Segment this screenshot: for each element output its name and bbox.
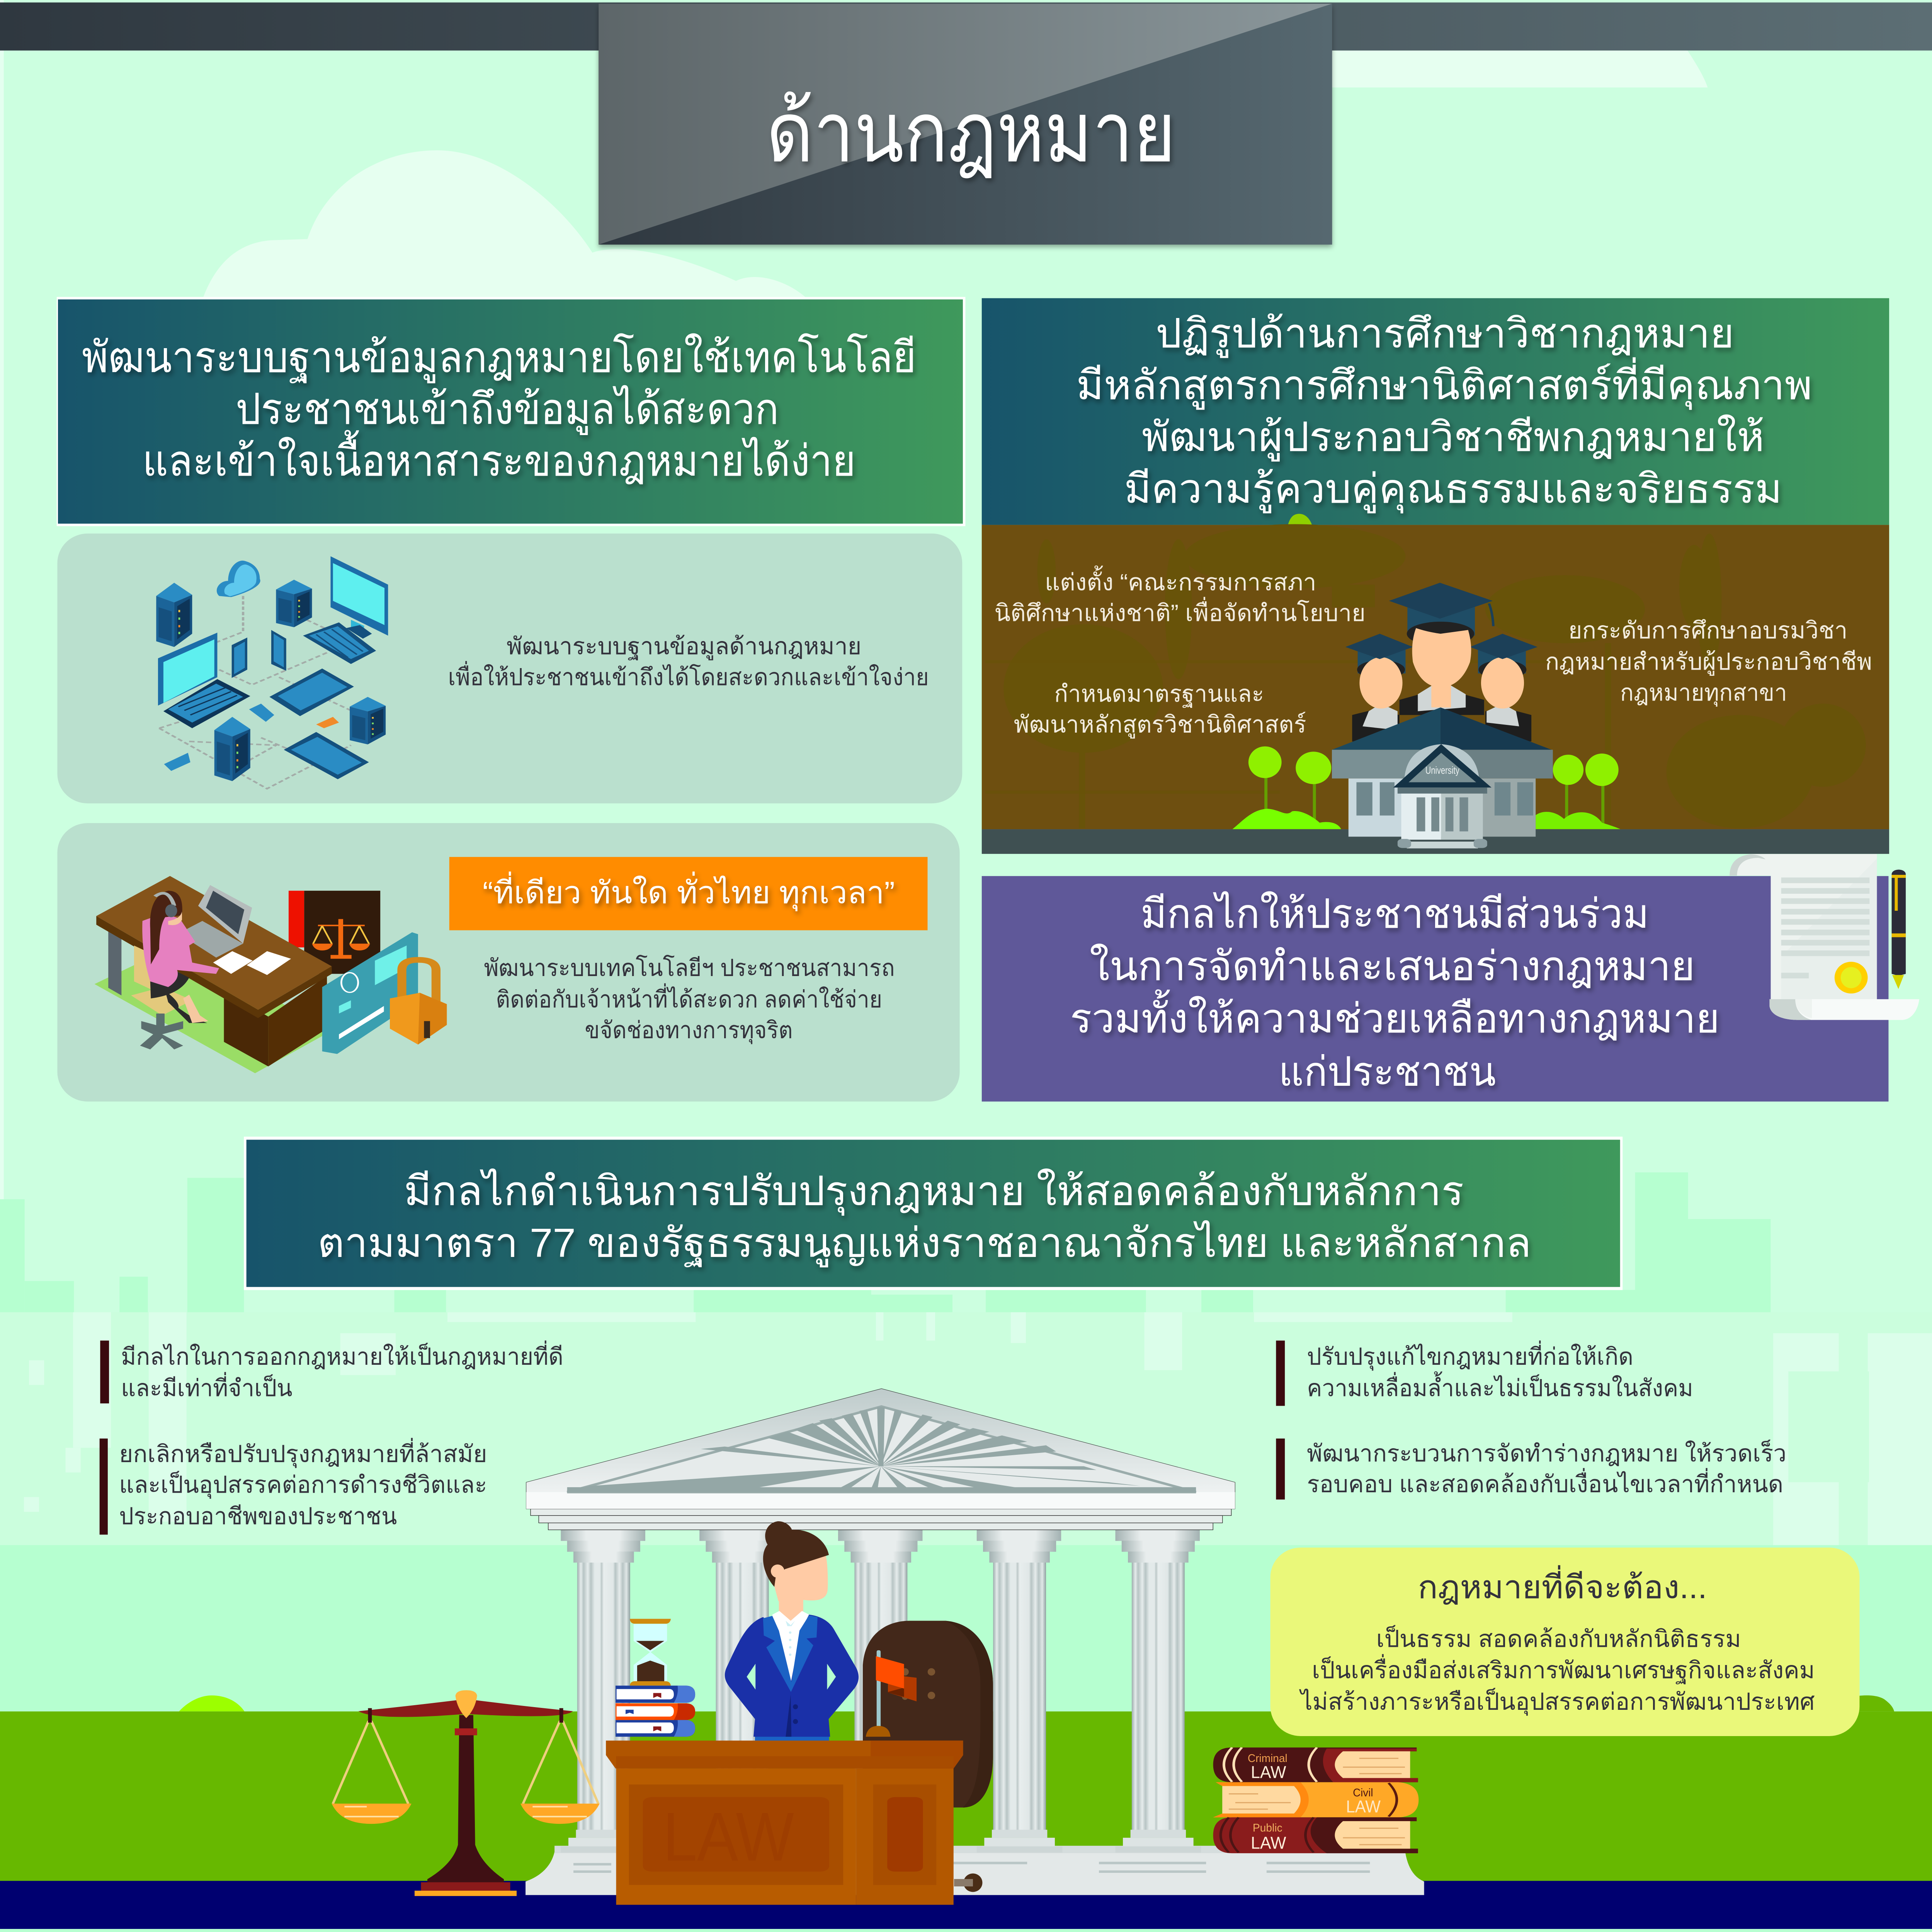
panel: legal database heading [57, 297, 965, 526]
heading text: legal education: มีหลักสูตรการศึกษานิติศาสตร์ที่มีคุณภาพ [1076, 357, 1812, 410]
icon: woman at desk with card and lock [95, 876, 447, 1073]
clouds [203, 51, 1708, 298]
illustration: courthouse temple [526, 1389, 1424, 1895]
book labels: Civil [1353, 1787, 1373, 1799]
illustration: balance scale [332, 1690, 600, 1896]
heading text: law reform: ตามมาตรา 77 ของรัฐธรรมนูญแห่งราชอาณาจักรไทย และหลักสากล [318, 1220, 1531, 1267]
book labels: LAW [1251, 1833, 1286, 1853]
bullet: good law: และมีเท่าที่จำเป็น [121, 1372, 293, 1401]
text: technology description: พัฒนาระบบเทคโนโลยีฯ ประชาชนสามารถ [484, 954, 895, 981]
heading text: legal education: พัฒนาผู้ประกอบวิชาชีพกฎหมายให้ [1142, 414, 1764, 462]
title text: ด้านกฎหมาย [766, 86, 1176, 179]
road [982, 829, 1889, 854]
panel: technology service card [57, 823, 960, 1102]
icon: hourglass and small books [616, 1619, 695, 1737]
desk label LAW: LAW [663, 1798, 794, 1876]
icon: network of devices [156, 556, 388, 789]
callout body: เป็นธรรม สอดคล้องกับหลักนิติธรรม [1376, 1625, 1741, 1652]
illustration: stack of law books [1213, 1747, 1418, 1853]
text: raise training level: กฎหมายสำหรับผู้ประกอบวิชาชีพ [1545, 649, 1872, 676]
bullet: drafting process: รอบคอบ และสอดคล้องกับเงื่อนไขเวลาที่กำหนด [1307, 1468, 1783, 1497]
bullet: fix unfair laws [1276, 1340, 1693, 1406]
callout: good law must be [1270, 1548, 1859, 1736]
heading text: legal education [1076, 311, 1812, 514]
callout: orange slogan [449, 857, 928, 930]
heading text: legal database [82, 333, 916, 485]
grass band [0, 1711, 1932, 1881]
bullet: fix unfair laws: ความเหลื่อมล้ำและไม่เป็นธรรมในสังคม [1307, 1371, 1693, 1401]
heading text: legal database: พัฒนาระบบฐานข้อมูลกฎหมายโดยใช้เทคโนโลยี [82, 333, 916, 384]
bullet: good law [100, 1340, 563, 1403]
bullet: drafting process [1276, 1439, 1786, 1500]
text: raise training level [1545, 617, 1872, 707]
heading text: public participation: มีกลไกให้ประชาชนมีส่วนร่วม [1141, 891, 1649, 937]
heading text: legal database: และเข้าใจเนื้อหาสาระของกฎหมายได้ง่าย [143, 430, 856, 485]
ground navy band [0, 1881, 1932, 1929]
illustration: graduates and university [1233, 583, 1620, 849]
callout body: ไม่สร้างภาระหรือเป็นอุปสรรคต่อการพัฒนาประเทศ [1299, 1688, 1815, 1716]
book labels [1248, 1752, 1381, 1853]
book labels: Criminal [1248, 1752, 1287, 1765]
text: raise training level: ยกระดับการศึกษาอบรมวิชา [1568, 617, 1847, 643]
bullet: repeal outdated laws [100, 1438, 487, 1535]
text: curriculum standard: พัฒนาหลักสูตรวิชานิติศาสตร์ [1014, 711, 1306, 739]
callout heading: กฎหมายที่ดีจะต้อง... [1418, 1565, 1707, 1605]
illustration: lawyer, desk and chair [606, 1521, 993, 1905]
heading text: legal database: ประชาชนเข้าถึงข้อมูลได้สะดวก [236, 385, 779, 435]
heading text: public participation: รวมทั้งให้ความช่วยเหลือทางกฎหมาย [1070, 989, 1719, 1041]
heading text: law reform: มีกลไกดำเนินการปรับปรุงกฎหมาย ให้สอดคล้องกับหลักการ [404, 1168, 1464, 1216]
title panel [599, 4, 1332, 245]
text: database description [448, 633, 929, 690]
bullet: repeal outdated laws: ประกอบอาชีพของประชาชน [119, 1503, 397, 1529]
text: appoint committee: แต่งตั้ง “คณะกรรมการสภา [1045, 565, 1316, 595]
bullet: good law: มีกลไกในการออกกฎหมายให้เป็นกฎหมายที่ดี [121, 1340, 563, 1369]
callout body: เป็นเครื่องมือส่งเสริมการพัฒนาเศรษฐกิจและสังคม [1312, 1654, 1815, 1684]
book labels: Public [1253, 1822, 1282, 1834]
bullet: repeal outdated laws: และเป็นอุปสรรคต่อการดำรงชีวิตและ [119, 1471, 487, 1499]
heading text: law reform [318, 1168, 1531, 1267]
text: database description: เพื่อให้ประชาชนเข้าถึงได้โดยสะดวกและเข้าใจง่าย [448, 661, 929, 690]
panel: legal education heading [982, 298, 1889, 525]
text: curriculum standard: กำหนดมาตรฐานและ [1054, 681, 1264, 708]
panel: public participation [982, 876, 1888, 1102]
heading text: public participation: ในการจัดทำและเสนอร่างกฎหมาย [1090, 944, 1695, 989]
text: raise training level: กฎหมายทุกสาขา [1620, 679, 1787, 707]
text: curriculum standard [1014, 681, 1306, 739]
heading text: legal education: ปฏิรูปด้านการศึกษาวิชากฎหมาย [1156, 311, 1734, 358]
bullet: repeal outdated laws: ยกเลิกหรือปรับปรุงกฎหมายที่ล้าสมัย [119, 1438, 487, 1468]
panel: law reform heading [244, 1137, 1622, 1290]
text: database description: พัฒนาระบบฐานข้อมูลด้านกฎหมาย [507, 633, 861, 660]
panel: education measures [982, 514, 1889, 854]
book labels: LAW [1251, 1762, 1286, 1782]
panel: database card [57, 534, 962, 803]
city skyline [0, 1172, 1932, 1713]
top bar [0, 2, 1932, 51]
text: appoint committee [994, 565, 1366, 626]
text: technology description [484, 954, 895, 1044]
lime hills [179, 1696, 1894, 1711]
book labels: LAW [1346, 1797, 1381, 1816]
icon: scroll and pen [1730, 854, 1919, 1020]
desk [606, 1741, 963, 1905]
callout body [1299, 1625, 1815, 1716]
heading text: public participation: แก่ประชาชน [1279, 1049, 1496, 1094]
text: appoint committee: นิติศึกษาแห่งชาติ” เพื่อจัดทำนโยบาย [994, 597, 1366, 626]
bullet: fix unfair laws: ปรับปรุงแก้ไขกฎหมายที่ก่อให้เกิด [1307, 1340, 1633, 1371]
text: technology description: ติดต่อกับเจ้าหน้าที่ได้สะดวก ลดค่าใช้จ่าย [496, 983, 882, 1012]
scenery: faded park [985, 524, 1875, 828]
bullet: drafting process: พัฒนากระบวนการจัดทำร่างกฎหมาย ให้รวดเร็ว [1307, 1440, 1786, 1466]
label: University: University [1425, 764, 1459, 776]
heading text: legal education: มีความรู้ควบคู่คุณธรรมและจริยธรรม [1124, 466, 1782, 514]
text: technology description: ขจัดช่องทางการทุจริต [585, 1017, 793, 1044]
callout: orange slogan: “ที่เดียว ทันใด ทั่วไทย ทุกเวลา” [483, 871, 895, 911]
heading text: public participation [1070, 891, 1719, 1094]
